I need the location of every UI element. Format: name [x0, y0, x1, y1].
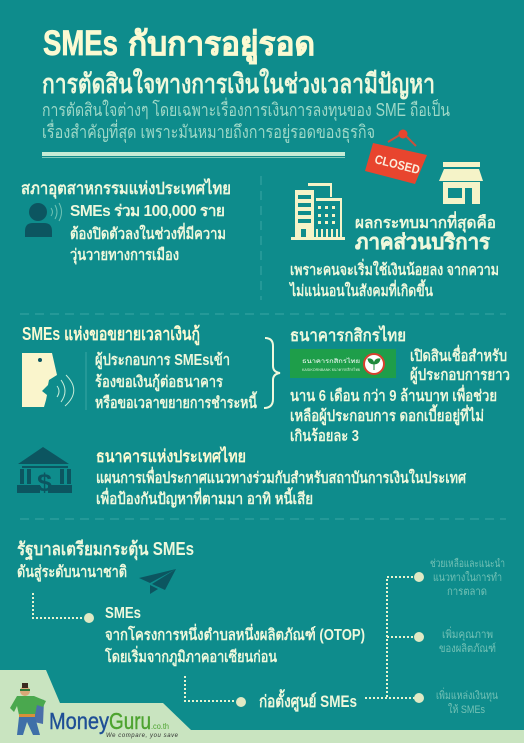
Kasikorn text: ผู้ประกอบการยาว	[410, 366, 510, 386]
branch labels: ของผลิตภัณฑ์	[439, 642, 496, 655]
heading: Kasikorn: ธนาคารกสิกรไทย	[290, 325, 406, 345]
loan text: หรือขอเวลาขยายการชำระหนี้	[95, 391, 257, 412]
mascot	[10, 683, 46, 735]
logo: Kasikornbank: ธนาคารกสิกรไทย	[302, 357, 360, 365]
subheading: ดันสู่ระดับนานาชาติ	[17, 563, 127, 583]
connector nodes	[84, 572, 424, 707]
tagline: We compare, you save	[106, 733, 179, 739]
BOT text: เพื่อป้องกันปัญหาที่ตามมา อาทิ หนี้เสีย	[96, 487, 313, 508]
icon: shop	[439, 162, 483, 204]
panel: Kasikorn bank	[290, 325, 510, 445]
brace	[264, 338, 280, 408]
federation text: ต้องปิดตัวลงในช่วงที่มีความ	[70, 222, 226, 243]
logo: MoneyGuru	[10, 683, 179, 739]
Kasikorn text: เปิดสินเชื่อสำหรับ	[410, 344, 507, 365]
intro text	[42, 97, 450, 143]
SMEs OTOP text: โดยเริ่มจากภูมิภาคอาเซียนก่อน	[104, 645, 277, 668]
impact highlight: ภาคส่วนบริการ	[355, 231, 491, 254]
branch labels: เพิ่มแหล่งเงินทุน	[436, 687, 498, 702]
impact text: ไม่แน่นอนในสังคมที่เกิดขึ้น	[288, 279, 433, 300]
branch labels: แนวทางในการทำ	[433, 571, 502, 584]
loan text	[95, 351, 257, 412]
icon: closed sign	[365, 130, 427, 184]
panel: loan extension	[22, 324, 280, 412]
branch labels	[430, 557, 505, 716]
Kasikorn text: เกินร้อยละ 3	[290, 427, 359, 445]
title	[43, 24, 315, 65]
icon: bank: $	[37, 469, 52, 497]
icon: buildings	[291, 183, 345, 240]
logo: Kasikornbank	[290, 349, 396, 378]
branch labels: การตลาด	[447, 586, 487, 598]
icon: speaking face	[22, 353, 74, 407]
wordmark: Money	[49, 708, 109, 734]
icon: paper plane	[139, 569, 176, 594]
panel: impact on services	[288, 183, 499, 300]
SMEs OTOP text	[104, 605, 365, 668]
impact heading: ผลกระทบมากที่สุดคือ	[355, 211, 496, 233]
logo: MoneyGuru: .co.th	[151, 722, 169, 731]
intro text: เรื่องสำคัญที่สุด เพราะมันหมายถึงการอยู่รอดของธุรกิจ	[42, 119, 375, 143]
federation text: วุ่นวายทางการเมือง	[70, 246, 179, 265]
SME center label: ก่อตั้งศูนย์ SMEs	[259, 689, 357, 713]
federation text: SMEs ร่วม 100,000 ราย	[70, 203, 225, 220]
SMEs OTOP text: จากโครงการหนึ่งตำบลหนึ่งผลิตภัณฑ์ (OTOP)	[105, 623, 365, 644]
impact text	[288, 258, 499, 300]
SMEs OTOP text: SMEs	[105, 605, 141, 622]
heading rule	[42, 152, 345, 158]
logo: MoneyGuru: Guru	[109, 708, 151, 734]
heading: stimulus: รัฐบาลเตรียมกระตุ้น SMEs	[17, 539, 194, 561]
panel: Bank of Thailand	[17, 446, 467, 508]
title: กับการอยู่รอด	[128, 25, 315, 65]
heading: BOT: ธนาคารแห่งประเทศไทย	[96, 446, 246, 466]
footer band	[0, 670, 524, 743]
icon: closed sign: CLOSED	[373, 152, 421, 177]
icon: bank	[17, 447, 72, 497]
loan text: ผู้ประกอบการ SMEsเข้า	[95, 351, 230, 371]
panel: industry federation	[21, 178, 231, 265]
panel: government stimulus	[17, 539, 505, 716]
Kasikorn text	[290, 344, 510, 445]
icon: speaking person	[25, 203, 62, 237]
title: SMEs	[43, 24, 118, 63]
connectors	[33, 577, 415, 701]
heading: loan extension: SMEs แห่งขอขยายเวลาเงินกู้	[22, 324, 200, 346]
Kasikorn text: เหลือผู้ประกอบการ ดอกเบี้ยอยู่ที่ไม่	[290, 404, 484, 427]
BOT text	[96, 466, 467, 508]
federation text	[70, 203, 226, 265]
heading: federation: สภาอุตสาหกรรมแห่งประเทศไทย	[21, 178, 231, 199]
logo: Kasikornbank: KASIKORNBANK ธนาคารกสิกรไทย	[302, 367, 360, 372]
loan text: ร้องขอเงินกู้ต่อธนาคาร	[95, 373, 224, 393]
branch labels: เพิ่มคุณภาพ	[442, 626, 493, 641]
branch labels: ให้ SMEs	[448, 703, 485, 716]
